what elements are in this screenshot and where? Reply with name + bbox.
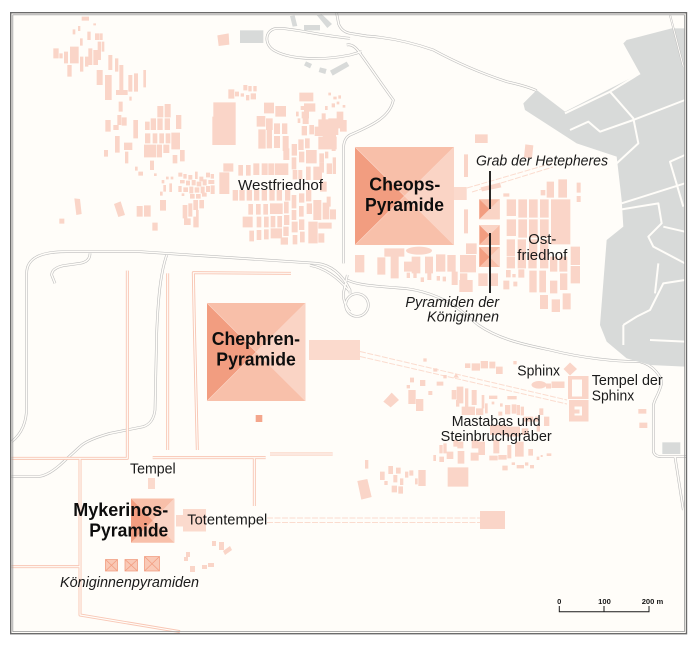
- Cheops mortuary temple: [454, 187, 467, 200]
- Sphinx: [532, 362, 577, 389]
- label: Ostfriedhof: [517, 232, 568, 264]
- Tempel der Sphinx buildings: [568, 376, 588, 422]
- label: Chephren-Pyramide: [212, 329, 300, 370]
- label: Tempel der Sphinx: [592, 373, 663, 405]
- Mastabas und Steinbruchgräber tombs: [357, 358, 647, 500]
- label: Cheops-Pyramide: [365, 175, 444, 215]
- label: Königinnenpyramiden: Königinnenpyramiden: [60, 575, 199, 591]
- queens' pyramids at Mykerinos: [106, 556, 160, 571]
- label: Grab der Hetepheres: Grab der Hetepheres: [476, 154, 608, 170]
- label: Mykerinos-Pyramide: Pyramide: [89, 521, 168, 541]
- label: Ostfriedhof: friedhof: [517, 248, 568, 264]
- small satellite pyramid: [256, 415, 262, 422]
- label: Mykerinos-Pyramide: Mykerinos-: [73, 500, 168, 520]
- Mykerinos mortuary temple: [176, 509, 206, 532]
- Cheops pyramid: [355, 147, 454, 245]
- leader line: Grab der Hetepheres: [489, 171, 491, 209]
- scale bar: 200 m: [642, 597, 663, 606]
- label: Mastabas und Steinbruchgräber: [441, 414, 552, 445]
- label: Ostfriedhof: Ost-: [528, 232, 557, 248]
- label: Cheops-Pyramide: Pyramide: [365, 195, 444, 215]
- label: Westfriedhof: Westfriedhof: [238, 178, 324, 194]
- small tombs near Mykerinos: [184, 541, 232, 572]
- label: Mykerinos-Pyramide: [73, 500, 168, 541]
- label: Chephren-Pyramide: Chephren-: [212, 329, 300, 349]
- leader line: Pyramiden der Königinnen: [489, 233, 491, 293]
- roads: [12, 13, 687, 510]
- Chephren mortuary temple: [309, 340, 360, 360]
- label: Totentempel: Totentempel: [187, 512, 267, 528]
- Ostfriedhof tombs: [355, 134, 581, 312]
- label: Chephren-Pyramide: Pyramide: [216, 350, 296, 370]
- label: Pyramiden der Königinnen: Königinnen: [427, 310, 499, 326]
- causeways: [267, 163, 567, 522]
- scale bar: 0: [557, 597, 561, 606]
- label: Tempel der Sphinx: Tempel der: [592, 373, 663, 389]
- scale bar: [557, 597, 663, 612]
- valley temple: [480, 511, 505, 529]
- Tempel building: [148, 478, 155, 489]
- label: Pyramiden der Königinnen: [405, 295, 500, 326]
- Mykerinos pyramid: [131, 498, 174, 543]
- walls: [12, 271, 333, 632]
- label: Cheops-Pyramide: Cheops-: [369, 175, 440, 195]
- label: Tempel der Sphinx: Sphinx: [592, 389, 635, 405]
- label: Sphinx: Sphinx: [517, 364, 561, 380]
- label: Pyramiden der Königinnen: Pyramiden der: [405, 295, 500, 311]
- Westfriedhof tombs: [53, 17, 347, 245]
- label: Mastabas und Steinbruchgräber: Steinbruchgräber: [441, 429, 552, 445]
- Chephren pyramid: [207, 303, 306, 401]
- label: Tempel: Tempel: [130, 461, 176, 477]
- label: Mastabas und Steinbruchgräber: Mastabas und: [452, 414, 541, 430]
- city district: [523, 15, 685, 367]
- scale bar: 100: [598, 597, 611, 606]
- gray buildings: [240, 14, 680, 454]
- temples: [148, 187, 505, 572]
- queens' pyramids at Cheops: [479, 199, 500, 267]
